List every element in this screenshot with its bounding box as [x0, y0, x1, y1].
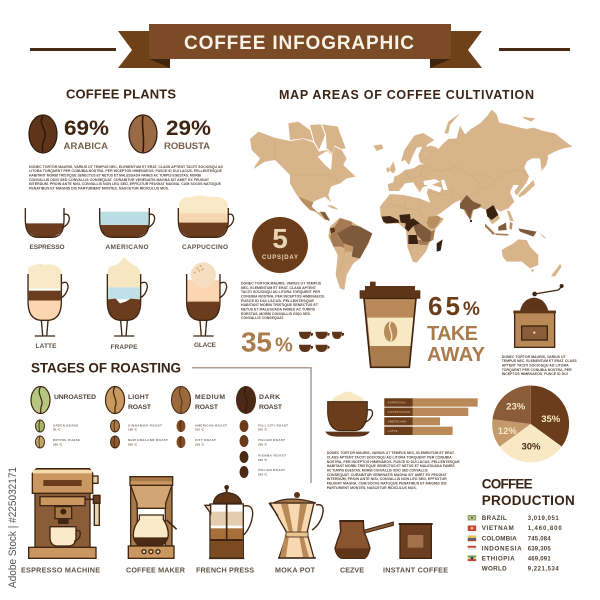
roast details: dark — [240, 420, 288, 478]
text block: grinder: DONEC TORTOR MAURIS, VARIUS UT — [502, 355, 566, 359]
map: africa and oceania — [380, 194, 562, 277]
stat: take away: 65 — [428, 291, 460, 321]
text block: bar chart — [327, 451, 460, 490]
icon: cappuccino cup — [178, 195, 234, 237]
bar chart: coffee types: AMERICANO — [388, 419, 407, 423]
icon: dark roast bean — [236, 386, 256, 414]
roast details: dark: ITALIAN ROAST — [258, 438, 285, 442]
roast details: light: NEW ENGLAND ROAST — [128, 438, 168, 442]
label: DARK — [259, 394, 280, 401]
table: coffee production: ETHIOPIA — [482, 555, 515, 562]
row: world — [482, 565, 559, 572]
label — [259, 394, 283, 411]
table: coffee production: VIETNAM — [482, 525, 514, 532]
text block: bar chart: PARTURIENT MONTES, NASCETUR RIDICULUS MUS. — [327, 486, 417, 490]
title banner — [30, 24, 570, 68]
label: COFFEE MAKER — [126, 566, 186, 575]
pie chart: 30% — [521, 442, 541, 452]
roast details: unroasted — [36, 420, 80, 448]
icon: unroasted bean — [31, 386, 50, 414]
stat: take away: % — [463, 299, 480, 320]
row: world: WORLD — [482, 565, 507, 572]
label: LATTE — [36, 343, 57, 350]
bar chart: coffee types: ESPRESSO — [388, 401, 406, 405]
icon: espresso cup — [25, 208, 69, 237]
icon: coffee grinder — [513, 284, 564, 347]
label: ROAST — [195, 404, 219, 411]
roast details: dark: 225 °C — [258, 428, 268, 432]
table: coffee production: COLOMBIA — [482, 535, 517, 542]
pie chart: 35% — [541, 414, 561, 425]
label — [195, 394, 225, 411]
heading: coffee production — [482, 476, 575, 508]
table: coffee production: INDONESIA — [482, 545, 522, 552]
roast details: light: 205 °C — [128, 442, 138, 446]
bar chart: coffee types: LATTE — [388, 429, 398, 433]
roast details: medium: 210 °C — [195, 428, 205, 432]
icon: instant coffee — [399, 524, 433, 558]
watermark side text: Adobe Stock | #225032171 — [7, 467, 19, 588]
panel: roasting stages — [31, 386, 288, 478]
text block: cups: NEC, ELEMENTUM ET ERAT. CLASS APTENT — [241, 286, 317, 290]
table: coffee production: 639,305 — [528, 546, 551, 552]
heading: coffee production: COFFEE — [482, 476, 533, 491]
roast details: medium: CITY ROAST — [195, 438, 216, 442]
roast details: unroasted: 160 °C — [53, 442, 63, 446]
panel: coffee drinks — [25, 195, 234, 351]
icon: small cups — [299, 332, 344, 352]
text block: bar chart: HABITANT MORBI TRISTIQUE SENECTUS ET NETUS ET MALESUADA FAMES — [327, 464, 455, 468]
label: UNROASTED — [54, 394, 96, 401]
text block: grinder: INCEPTOS HIMENAEOS. FUSCE ID DUI — [502, 372, 568, 376]
text block: grinder: TEMPUS NEC, ELEMENTUM ET ERAT. CLASS — [502, 359, 577, 363]
text block: cups: CONUBIA NOSTRA, PER INCEPTOS HIMENAEOS. — [241, 295, 325, 299]
text block: grinder: APTENT TACITI SOCIOSQU AD LITORA — [502, 364, 569, 368]
stat: arabica: 69% — [64, 117, 109, 140]
badge: 5 cups per day: CUPS|DAY — [262, 255, 298, 261]
map: americas — [250, 122, 383, 290]
text block: cups: HABITANT MORBI TRISTIQUE SENECTUS ET — [241, 303, 319, 307]
stat: 35 percent: % — [275, 335, 293, 357]
bar chart: coffee types: CAPPUCCINO — [388, 410, 411, 414]
pie chart: 12% — [498, 426, 517, 437]
icon: frappe glass — [107, 257, 147, 336]
label: ESPRESSO MACHINE — [21, 566, 100, 575]
roast details: light: CINNAMON ROAST — [128, 423, 162, 427]
flag: ethiopia — [468, 556, 476, 561]
table: coffee production: BRAZIL — [482, 515, 507, 522]
table: coffee production — [468, 515, 562, 572]
label: CAPPUCCINO — [182, 244, 228, 251]
heading: coffee production: PRODUCTION — [482, 493, 575, 508]
pie chart: 23% — [506, 402, 526, 412]
text block: bar chart: CLASS APTENT TACITI SOCIOSQU AD LITORA TORQUENT PER CONUBIA — [327, 456, 452, 460]
heading: stages of roasting: STAGES OF ROASTING — [31, 360, 181, 376]
text block: bar chart: NOSTRA, PER INCEPTOS HIMENAEOS. FUSCE ID DUI LACUS. PELLENTESQUE — [327, 460, 460, 464]
icon: french press — [205, 485, 253, 558]
icon: cezve — [335, 521, 393, 558]
text block: cups: DONEC TORTOR MAURIS, VARIUS UT TEMPUS — [241, 282, 322, 286]
pie chart — [492, 386, 569, 462]
label: FRENCH PRESS — [196, 566, 254, 575]
roast details: dark: FULL CITY ROAST — [258, 423, 288, 427]
label: LIGHT — [128, 394, 150, 401]
stat: robusta: 29% — [166, 117, 211, 140]
title: COFFEE INFOGRAPHIC — [184, 33, 414, 54]
text block: plants: LITORA TORQUENT PER CONUBIA NOSTRA, PER INCEPTOS HIMENAEOS. FUSCE ID DUI LACUS. PELLENTESQUE — [29, 169, 223, 173]
roast details: light — [110, 420, 168, 448]
badge: 5 cups per day: 5 — [272, 223, 288, 254]
badge: 5 cups per day — [252, 217, 308, 273]
label: FRAPPE — [110, 344, 138, 351]
roast details: medium: AMERICAN ROAST — [195, 423, 227, 427]
stat: arabica: ARABICA — [64, 141, 108, 152]
text block: plants: HABITANT MORBI TRISTIQUE SENECTUS ET NETUS ET MALESUADA FAMES AC TURPIS EGESTAS. MORBI — [29, 174, 201, 178]
stat: robusta: ROBUSTA — [164, 141, 210, 152]
flag: indonesia — [468, 546, 476, 550]
frame line around roasting — [192, 368, 311, 483]
icon: glace glass — [187, 262, 227, 336]
text block: bar chart: FEUGIAT MAGNA. CUM SOCIIS NATOQUE PENATIBUS ET MAGNIS DIS — [327, 482, 447, 486]
roast details: dark: 230 °C — [258, 442, 268, 446]
roast details: dark: ITALIAN ROAST — [258, 468, 285, 472]
map: eurasia — [386, 110, 572, 224]
text block: cups: NETUS ET MALESUADA FAMES AC TURPIS — [241, 308, 316, 312]
flag: colombia — [468, 536, 476, 541]
roast details: dark: VIENNA ROAST — [258, 454, 286, 458]
label: CEZVE — [340, 566, 364, 575]
icon: takeaway cup — [360, 282, 420, 367]
label — [128, 394, 152, 411]
label: MOKA POT — [275, 566, 316, 575]
row: world: 9,221,534 — [528, 566, 559, 572]
stat: 35 percent — [241, 327, 293, 358]
roast details: medium — [176, 420, 227, 448]
table: coffee production: 469,091 — [528, 556, 551, 562]
stat: take away: TAKE — [427, 323, 478, 345]
table: coffee production: 745,084 — [528, 536, 551, 542]
text block: cups: EGESTAS. MORBI CONVALLIS ODIO SED — [241, 312, 310, 316]
roast details: unroasted: GREEN BEANS — [53, 423, 78, 427]
text block: grinder: TORQUENT PER CONUBIA NOSTRA, PER — [502, 368, 572, 372]
label: GLACE — [194, 342, 217, 349]
text block: bar chart: AC TURPIS EGESTAS. MORBI CONVALLIS ODIO SED CONVALLIS — [327, 469, 428, 473]
table: coffee production: 3,019,051 — [528, 516, 559, 522]
label: AMERICANO — [106, 244, 148, 251]
label: ESPRESSO — [30, 244, 64, 251]
text block: grinder — [502, 355, 577, 376]
icon: espresso machine — [29, 469, 100, 558]
stat: 35 percent: 35 — [241, 327, 272, 358]
table: coffee production: 1,460,800 — [528, 526, 562, 532]
text block: cups — [241, 282, 325, 320]
text block: plants: CONVALLIS ODIO SED CONVALLIS CONSEQUAT. CURABITUR VENENATIS MAGNA SIT AMET EX FEUGIAT — [29, 178, 210, 182]
roast details: dark: 245 °C — [258, 472, 268, 476]
icon: latte glass — [28, 264, 68, 336]
panel: coffee plants — [29, 115, 223, 190]
roast details: dark: 240 °C — [258, 458, 268, 462]
roast details: unroasted: DRYING PHASE — [53, 438, 80, 442]
icon: americano cup — [100, 208, 155, 237]
icon: medium roast bean — [172, 386, 190, 414]
text block: bar chart: DONEC TORTOR MAURIS, VARIUS UT TEMPUS NEC, ELEMENTUM ET ERAT. — [327, 451, 455, 455]
stat: take away: AWAY — [427, 344, 486, 366]
label: ROAST — [128, 404, 152, 411]
text block: plants: INTERDUM. PROIN ANTE NISI, CONVALLIS NON LEO SED, EFFICITUR FEUGIAT MAGNA. CUM SOCIIS NATOQUE — [29, 182, 222, 186]
icon: light roast bean — [106, 386, 124, 414]
icon: coffee maker — [128, 477, 177, 558]
icon: big coffee cup — [325, 392, 372, 437]
icon: arabica bean — [29, 115, 57, 153]
stat: robusta — [164, 117, 211, 152]
flag: brazil — [468, 515, 476, 520]
stat: arabica — [64, 117, 109, 152]
label: ROAST — [259, 404, 283, 411]
roast details: medium: 219 °C — [195, 442, 205, 446]
roast details: unroasted: 82 °C — [53, 428, 61, 432]
text block: cups: CONVALLIS CONSEQUAT. — [241, 316, 284, 320]
icon: moka pot — [269, 492, 323, 558]
label: INSTANT COFFEE — [383, 566, 448, 575]
heading: coffee plants: COFFEE PLANTS — [66, 86, 176, 102]
flag: vietnam — [468, 526, 476, 531]
text block: cups: FUSCE ID DUI LACUS. PELLENTESQUE — [241, 299, 315, 303]
text block: plants: DONEC TORTOR MAURIS, VARIUS UT TEMPUS NEC, ELEMENTUM ET ERAT. CLASS APTENT TACITI SOCIOSQU AD — [29, 165, 223, 169]
text block: cups: TACITI SOCIOSQU AD LITORA TORQUENT PER — [241, 290, 320, 294]
label: MEDIUM — [195, 394, 225, 401]
panel: brewing equipment — [21, 469, 448, 575]
text block: plants — [29, 165, 223, 190]
text block: bar chart: CONSEQUAT. CURABITUR VENENATIS MAGNA SIT AMET EX FEUGIAT — [327, 473, 447, 477]
bar chart: coffee types — [384, 398, 478, 435]
icon: robusta bean — [129, 115, 157, 153]
heading: map: MAP AREAS OF COFFEE CULTIVATION — [279, 88, 534, 102]
text block: plants: PENATIBUS ET MAGNIS DIS PARTURIENT MONTES, NASCETUR RIDICULUS MUS. — [29, 186, 169, 190]
stat: take away — [427, 291, 486, 366]
text block: bar chart: INTERDUM. PROIN ANTE NISI, CONVALLIS NON LEO SED, EFFICITUR — [327, 477, 447, 481]
world map — [250, 110, 572, 290]
roast details: light: 196 °C — [128, 428, 138, 432]
